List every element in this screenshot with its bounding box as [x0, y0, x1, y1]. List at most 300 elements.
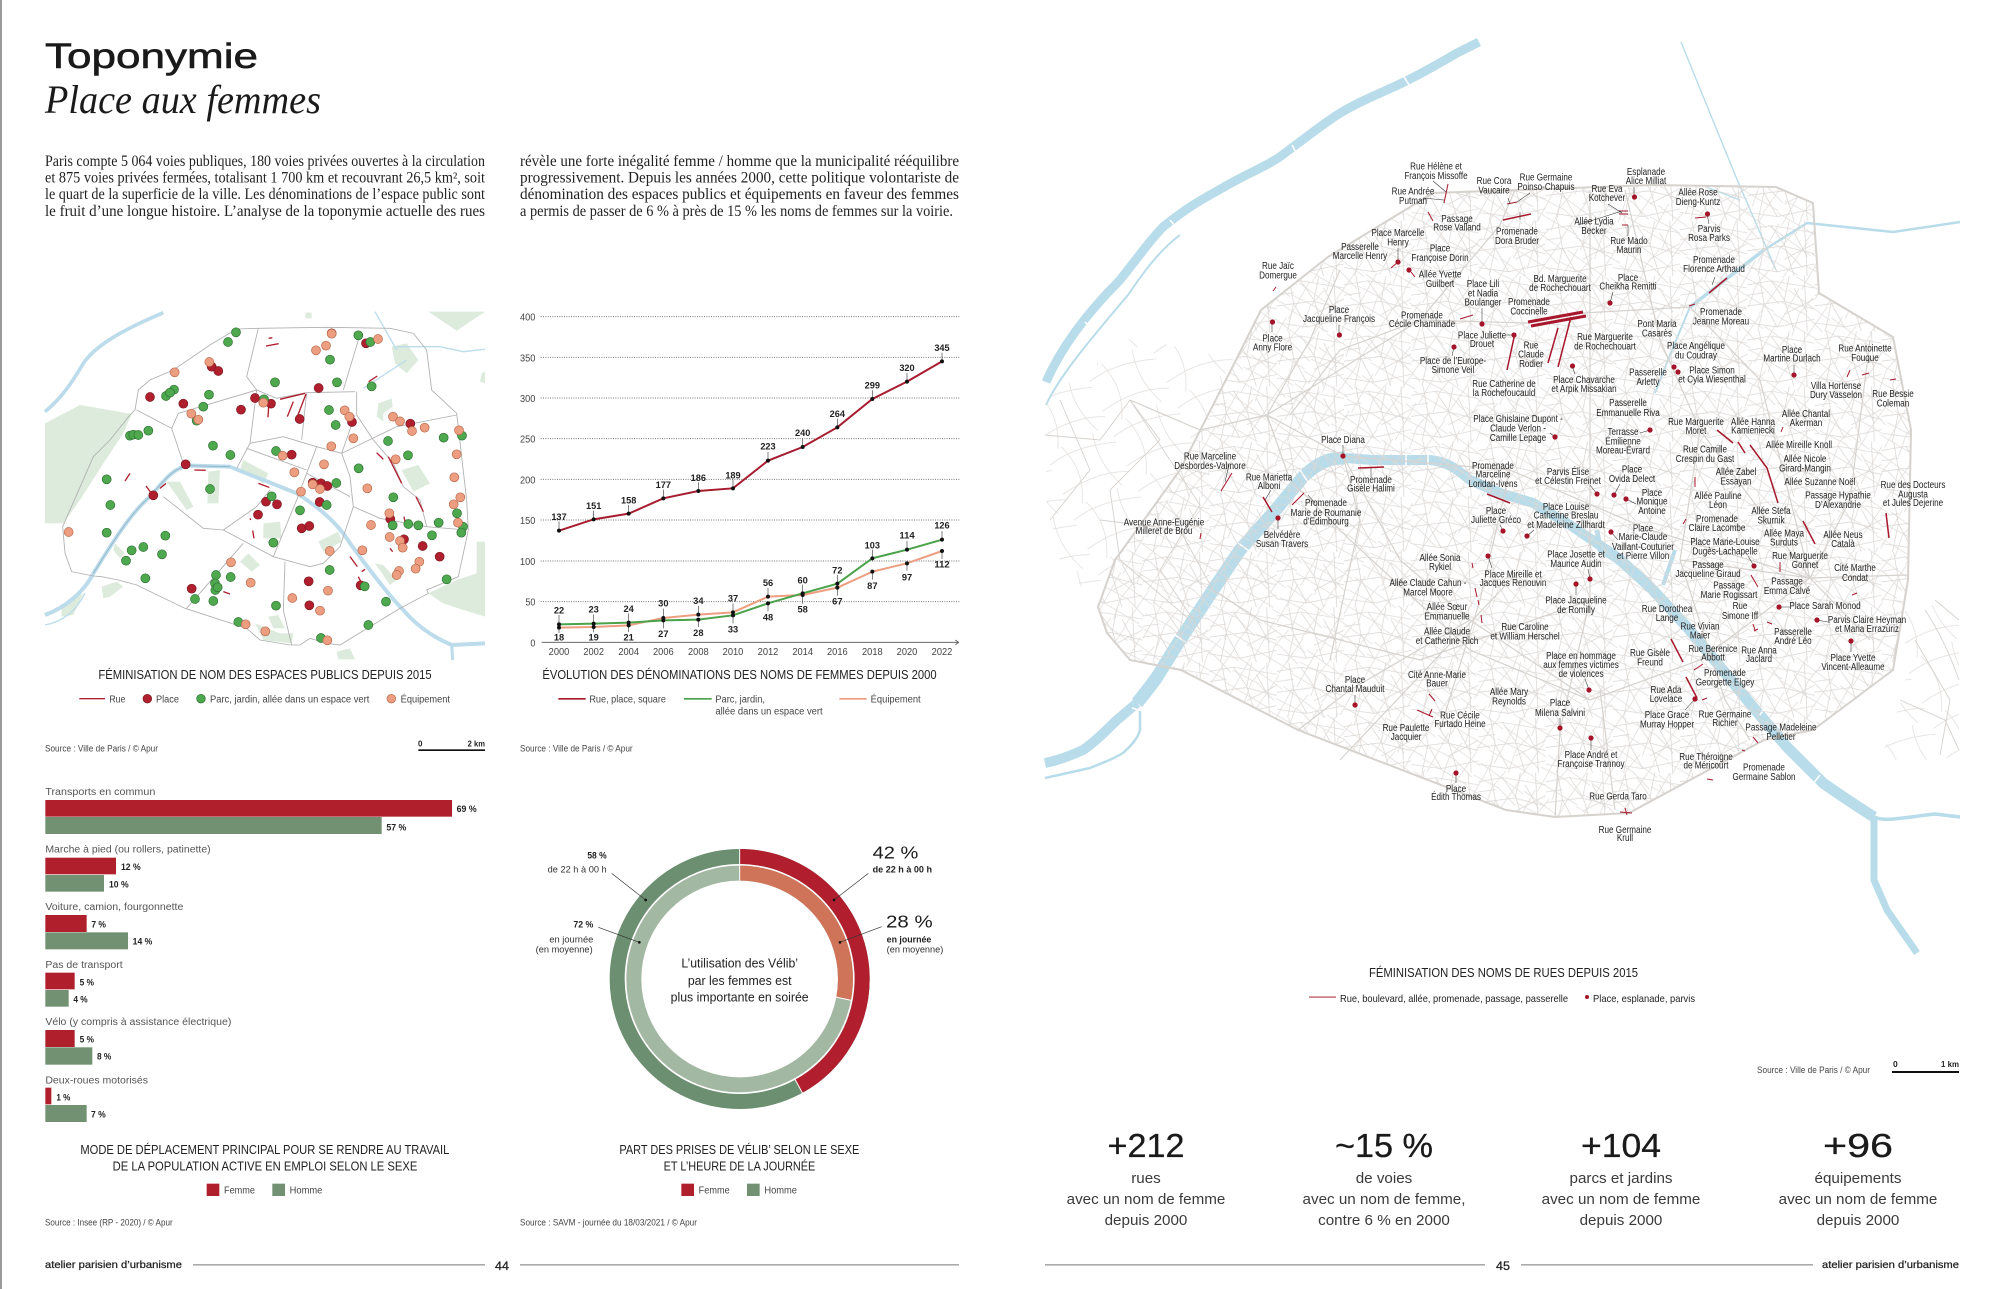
- chart value labels: 223: [760, 442, 776, 452]
- street name labels: Ovida Delect: [1609, 473, 1656, 484]
- street name labels: Jacquier: [1391, 731, 1421, 742]
- street name labels: de Rochechouart: [1529, 282, 1591, 293]
- bar category labels: Marche à pied (ou rollers, patinette): [45, 845, 211, 856]
- street name labels: Essayan: [1720, 476, 1752, 487]
- street name labels: Rose Valland: [1433, 222, 1481, 233]
- street name labels: Promenade: [1305, 497, 1347, 508]
- street name labels: Allée Neus: [1823, 529, 1863, 540]
- chart x axis: 2004: [618, 647, 640, 658]
- street name labels: Abbott: [1701, 652, 1725, 663]
- bar category labels: Voiture, camion, fourgonnette: [45, 902, 184, 913]
- callout 42 percent: 42 %: [873, 842, 918, 862]
- street name labels: Condat: [1842, 572, 1868, 583]
- bar value labels: 14 %: [133, 937, 153, 947]
- series: parks: [559, 540, 942, 624]
- stat: +212 streets: +212: [1108, 1127, 1184, 1164]
- street name labels: Dugès-Lachapelle: [1692, 546, 1758, 557]
- street name labels: Allée Zabel: [1716, 466, 1756, 477]
- street name labels: Allée Sonia: [1420, 552, 1461, 563]
- street name labels: Place Juliette: [1458, 330, 1506, 341]
- street name labels: Kamieniecki: [1731, 425, 1775, 436]
- street name labels: Passerelle: [1774, 626, 1812, 637]
- street name labels: et Arpik Missakian: [1551, 383, 1617, 394]
- street name labels: Rue Vivian: [1680, 621, 1720, 632]
- street name labels: d’Edimbourg: [1303, 516, 1349, 527]
- street name labels: Murray Hopper: [1640, 719, 1694, 730]
- street name labels: Juliette Gréco: [1471, 514, 1521, 525]
- street name labels: Parvis Claire Heyman: [1828, 614, 1906, 625]
- footer right page: 45: [1496, 1259, 1510, 1273]
- map source: Source : Ville de Paris / © Apur: [45, 744, 158, 754]
- stat: +96 equipment: depuis 2000: [1817, 1212, 1899, 1229]
- street name labels: Dieng-Kuntz: [1676, 196, 1721, 207]
- street name labels: Anny Flore: [1253, 342, 1292, 353]
- chart value labels: 103: [865, 541, 880, 551]
- stat: +96 equipment: avec un nom de femme: [1779, 1191, 1937, 1208]
- bar chart legend: Femme: [224, 1185, 255, 1196]
- stat: 15 percent of streets: [1303, 1127, 1465, 1229]
- bar chart legend: [207, 1184, 323, 1196]
- chart x axis: 2006: [653, 647, 674, 658]
- street name labels: Allée Pauline: [1694, 490, 1742, 501]
- bars: homme: [45, 817, 382, 1122]
- street name labels: Rue Ada: [1650, 684, 1682, 695]
- map markers: place: [145, 329, 444, 610]
- bar value labels: 7 %: [91, 1110, 106, 1120]
- street name labels: et Jules Dejerine: [1883, 497, 1943, 508]
- street name labels: de Romilly: [1557, 604, 1595, 615]
- chart x axis: 2002: [583, 647, 604, 658]
- street name labels: Rue Théroigne: [1679, 751, 1733, 762]
- chart x axis: [542, 640, 959, 658]
- bar value labels: 69 %: [457, 804, 477, 814]
- callout 58 percent: de 22 h à 00 h: [548, 865, 607, 875]
- chart x axis: 2016: [827, 647, 848, 658]
- donut legend: Femme: [699, 1185, 730, 1196]
- street name labels: Rue Gerda Taro: [1589, 791, 1647, 802]
- chart x axis: 2018: [862, 647, 883, 658]
- title: Place aux femmes: [44, 77, 321, 122]
- callout 58 percent: [548, 851, 607, 875]
- chart x axis: 2000: [549, 647, 569, 658]
- chart gridlines and y axis: 300: [520, 394, 535, 405]
- street name labels: Antoine: [1638, 505, 1666, 516]
- street name labels: Cité Marthe: [1834, 562, 1876, 573]
- street name labels: Rue Marceline: [1184, 451, 1236, 462]
- street name labels: Rue Antoinette: [1838, 343, 1892, 354]
- river islands and bridges: [1085, 70, 1820, 790]
- donut heading: [619, 1142, 859, 1173]
- street name labels: Gisèle Halimi: [1347, 483, 1395, 494]
- renamed streets: [1200, 184, 1896, 815]
- street name labels: Boulanger: [1465, 297, 1501, 308]
- street name labels: Rue des Docteurs: [1881, 479, 1946, 490]
- panel: map of public spaces feminisation: [45, 312, 485, 754]
- bar category labels: Transports en commun: [45, 787, 155, 798]
- street name labels: Florence Arthaud: [1683, 263, 1745, 274]
- footer right page: atelier parisien d’urbanisme: [1822, 1259, 1959, 1271]
- street name labels: Place: [1618, 272, 1638, 283]
- main map legend: Place, esplanade, parvis: [1593, 993, 1695, 1005]
- street name labels: Rue Andrée: [1392, 186, 1434, 197]
- street name labels: Place Simon: [1689, 365, 1735, 376]
- donut outer ring: [617, 856, 862, 1101]
- text block: introduction left column: le quart de la superficie de la ville. Les dénominations de l’espace public sont: [45, 186, 486, 203]
- stat: +104 parks: parcs et jardins: [1570, 1170, 1673, 1187]
- street name labels: Place: [1329, 304, 1349, 315]
- donut source: Source : SAVM - journée du 18/03/2021 / © Apur: [520, 1218, 697, 1228]
- chart heading: ÉVOLUTION DES DÉNOMINATIONS DES NOMS DE FEMMES DEPUIS 2000: [542, 667, 937, 682]
- street name labels: Place Louise: [1543, 501, 1589, 512]
- chart source: Source : Ville de Paris / © Apur: [520, 744, 633, 754]
- street name labels: Jeanne Moreau: [1693, 316, 1749, 327]
- street name labels: Rue Cora: [1477, 175, 1512, 186]
- main roads and ring road: [1045, 185, 1959, 817]
- street name labels: Rue Bessie: [1872, 388, 1914, 399]
- street name labels: Emmanuelle Riva: [1596, 407, 1660, 418]
- stat: 15 percent of streets: avec un nom de femme,: [1303, 1191, 1465, 1208]
- street name labels: de violences: [1558, 668, 1604, 679]
- street name labels: Édith Thomas: [1431, 791, 1481, 802]
- street name labels: Català: [1831, 538, 1855, 549]
- chart value labels: 264: [830, 409, 846, 419]
- street name labels: Place Jacqueline: [1545, 595, 1607, 606]
- street name labels: Allée Chantal: [1782, 408, 1830, 419]
- street name labels: Promenade: [1700, 306, 1742, 317]
- chart x axis: 2012: [758, 647, 778, 658]
- street name labels: Emma Calvé: [1764, 585, 1810, 596]
- street name labels: Maier: [1690, 630, 1710, 641]
- street name labels: Catherine Breslau: [1534, 510, 1598, 521]
- street name labels: Claire Lacombe: [1689, 522, 1745, 533]
- street name labels: D’Alexandrie: [1815, 499, 1861, 510]
- street name labels: Passage Hypathie: [1805, 490, 1871, 501]
- donut legend: [681, 1184, 797, 1196]
- street name labels: Place: [1262, 333, 1283, 344]
- street name labels: Allée Suzanne Noël: [1784, 476, 1856, 487]
- street name labels: Place Marcelle: [1371, 227, 1425, 238]
- donut centre text: [671, 956, 809, 1004]
- street name labels: Place: [1486, 505, 1506, 516]
- stat: +104 parks: +104: [1581, 1127, 1661, 1164]
- street name labels: Émilienne: [1605, 436, 1641, 447]
- street name labels: Girard-Mangin: [1779, 463, 1831, 474]
- bar chart heading: MODE DE DÉPLACEMENT PRINCIPAL POUR SE RENDRE AU TRAVAIL: [80, 1142, 449, 1157]
- street name labels: Rykiel: [1429, 561, 1451, 572]
- street name labels: Rue: [1733, 600, 1747, 611]
- street name labels: Cécile Chaminade: [1389, 318, 1455, 329]
- street name labels: Simone Veil: [1432, 364, 1474, 375]
- street name labels: Rue Eva: [1591, 183, 1623, 194]
- street name labels: Rosa Parks: [1688, 232, 1730, 243]
- street name labels: Marcelle Henry: [1333, 250, 1388, 261]
- street name labels: Place Lili: [1467, 278, 1499, 289]
- panel: bar chart commuting mode: [45, 787, 477, 1228]
- street name labels: Allée Hanna: [1731, 416, 1776, 427]
- street name labels: Alboni: [1258, 480, 1280, 491]
- stat: +212 streets: rues: [1131, 1170, 1161, 1187]
- street name labels: Belvédère: [1264, 529, 1300, 540]
- street name labels: Rue Germaine: [1599, 824, 1651, 835]
- street name labels: de Méricourt: [1683, 760, 1729, 771]
- chart value labels: 87: [867, 581, 877, 591]
- street name labels: Desbordes-Valmore: [1174, 460, 1246, 471]
- footer left page: [45, 1259, 959, 1273]
- donut legend: Homme: [764, 1185, 797, 1196]
- bar category labels: Deux-roues motorisés: [45, 1075, 148, 1086]
- street name labels: Rue Gisèle: [1630, 647, 1670, 658]
- street name labels: Furtado Heine: [1434, 718, 1486, 729]
- bars: femme: [45, 800, 452, 1104]
- street name labels: Place: [1642, 487, 1662, 498]
- street name labels: Maurin: [1617, 244, 1641, 255]
- chart value labels: 151: [586, 501, 601, 511]
- chart value labels: 23: [588, 604, 599, 614]
- chart value labels: 22: [554, 606, 564, 616]
- street name labels: Avenue Anne-Eugénie: [1124, 517, 1204, 528]
- panel: donut chart Velib: [520, 842, 943, 1228]
- street name labels: Becker: [1581, 225, 1607, 236]
- street network texture: [1046, 185, 1959, 817]
- callout 72 percent: en journée: [549, 934, 593, 944]
- map parks: [45, 312, 485, 659]
- chart value labels: 18: [554, 633, 564, 643]
- donut heading: ET L’HEURE DE LA JOURNÉE: [664, 1158, 815, 1173]
- street name labels: Place Mireille et: [1484, 569, 1542, 580]
- street name labels: Henry: [1387, 237, 1409, 248]
- bar value labels: 4 %: [73, 995, 88, 1005]
- series: equipment: [559, 551, 942, 628]
- bar value labels: 5 %: [80, 977, 95, 987]
- street name labels: Rue Marguerite: [1772, 550, 1828, 561]
- street name labels: Passage: [1771, 576, 1803, 587]
- street name labels: Promenade: [1704, 667, 1746, 678]
- street name labels: Claude: [1518, 349, 1544, 360]
- street name labels: Place André et: [1565, 749, 1618, 760]
- footer left page: 44: [495, 1259, 509, 1273]
- street name labels: Jacqueline François: [1303, 313, 1375, 324]
- chart x axis: 2014: [792, 647, 814, 658]
- street name labels: Loridan-Ivens: [1468, 478, 1518, 489]
- street name labels: Reynolds: [1492, 696, 1526, 707]
- chart value labels: 30: [658, 599, 668, 609]
- chart value labels: 60: [797, 575, 808, 585]
- street name labels: Augusta: [1898, 489, 1929, 500]
- chart x axis: 2022: [932, 647, 952, 658]
- street name labels: Allée Claude: [1424, 626, 1470, 637]
- street name labels: Place Josette et: [1547, 549, 1605, 560]
- stat: +104 parks: avec un nom de femme: [1542, 1191, 1700, 1208]
- street name labels: Place: [1446, 783, 1466, 794]
- title: Toponymie: [45, 37, 258, 76]
- street name labels: Chantal Mauduit: [1326, 683, 1385, 694]
- chart value labels: 21: [623, 633, 634, 643]
- street name labels: Rue Camille: [1683, 444, 1727, 455]
- street name labels: de Rochechouart: [1574, 341, 1636, 352]
- street name labels: Allée Maya: [1764, 528, 1805, 539]
- chart value labels: 24: [623, 604, 635, 614]
- panel: line chart evolution of names: [520, 313, 960, 754]
- text block: introduction left column: Paris compte 5 064 voies publiques, 180 voies privées ouvertes à la circulation: [45, 153, 485, 170]
- street name labels: Allée Yvette: [1419, 269, 1461, 280]
- street name labels: Lange: [1656, 612, 1678, 623]
- street name labels: Parvis: [1698, 223, 1721, 234]
- street name labels: Drouet: [1470, 338, 1495, 349]
- chart gridlines and y axis: [520, 313, 960, 649]
- street name labels: Germaine Sablon: [1732, 771, 1796, 782]
- street name labels: Rue Marguerite: [1668, 416, 1724, 427]
- bar value labels: [56, 804, 477, 1120]
- street name labels: Allée Lydia: [1574, 216, 1614, 227]
- bar category labels: Vélo (y compris à assistance électrique): [45, 1017, 231, 1028]
- street name labels: Camille Lepage: [1490, 432, 1546, 443]
- street name labels: Jacques Renouvin: [1480, 577, 1546, 588]
- main map legend: Rue, boulevard, allée, promenade, passage, passerelle: [1340, 993, 1568, 1005]
- street name labels: Passerelle: [1341, 241, 1379, 252]
- street name labels: Allée Stefa: [1751, 505, 1791, 516]
- map legend: [79, 692, 450, 705]
- stat: 15 percent of streets: ~15 %: [1335, 1127, 1433, 1164]
- street name labels: Rue Paulette: [1383, 722, 1429, 733]
- bar value labels: 8 %: [97, 1052, 112, 1062]
- main map scale bar: 1 km: [1941, 1059, 1959, 1069]
- street name labels: Allée Claude Cahun -: [1389, 577, 1467, 588]
- map scale bar: 0: [418, 740, 423, 749]
- stat: +96 equipment: [1779, 1127, 1937, 1229]
- street name labels: Claude Verlon -: [1490, 423, 1546, 434]
- callout 28 percent: en journée: [887, 934, 931, 944]
- stat: +104 parks: [1542, 1127, 1700, 1229]
- street name labels: Rue Marietta: [1246, 472, 1293, 483]
- chart value labels: 56: [763, 578, 773, 588]
- street name labels: Léon: [1709, 499, 1727, 510]
- street name labels: Rue Dorothea: [1642, 603, 1693, 614]
- bar category labels: Pas de transport: [45, 960, 123, 971]
- street name labels: Rue Hélène et: [1410, 161, 1462, 172]
- text block: introduction right column: dénomination des espaces publics et équipements en faveur des femmes: [520, 186, 959, 203]
- callout 28 percent: 28 %: [886, 911, 933, 931]
- street name labels: Jacqueline Giraud: [1675, 568, 1741, 579]
- street name labels: Place: [1622, 464, 1642, 475]
- text block: introduction right column: a permis de passer de 6 % à près de 15 % les noms de femmes sur la voirie.: [520, 203, 953, 220]
- street name labels: Promenade: [1472, 460, 1514, 471]
- street name labels: Passage: [1441, 213, 1473, 224]
- street name labels: Freund: [1637, 657, 1663, 668]
- main map source: Source : Ville de Paris / © Apur: [1757, 1065, 1870, 1075]
- street name labels: Marcel Moore: [1403, 587, 1453, 598]
- street name labels: Place Marie-Louise: [1690, 536, 1760, 547]
- street name labels: Richier: [1712, 717, 1738, 728]
- street name labels: Krull: [1617, 832, 1633, 843]
- map markers: equipment: [64, 329, 465, 645]
- footer right page: [1045, 1259, 1959, 1273]
- street name labels: Place Chavarche: [1553, 374, 1615, 385]
- street name labels: Passage: [1713, 580, 1745, 591]
- stat: +212 streets: avec un nom de femme: [1067, 1191, 1225, 1208]
- main map scale bar: 0: [1893, 1059, 1898, 1069]
- chart legend: Rue, place, square: [589, 694, 666, 705]
- callout 42 percent: [873, 842, 932, 875]
- callout 72 percent: (en moyenne): [536, 945, 593, 955]
- street name labels: Parvis Élise: [1547, 466, 1589, 477]
- street name labels: Allée Sœur: [1427, 601, 1467, 612]
- street name labels: Rue Caroline: [1501, 621, 1549, 632]
- chart gridlines and y axis: 50: [525, 598, 535, 609]
- street name labels: Passage: [1692, 559, 1724, 570]
- callout 42 percent: de 22 h à 00 h: [873, 865, 932, 875]
- street name labels: Moreau-Évrard: [1596, 445, 1650, 456]
- chart value labels: 299: [865, 380, 880, 390]
- map markers: parks: [102, 328, 467, 642]
- street name labels: Esplanade: [1627, 166, 1665, 177]
- map scale bar: 2 km: [468, 740, 485, 749]
- callout 72 percent: [536, 919, 594, 955]
- chart legend: [558, 692, 921, 717]
- bar value labels: 10 %: [109, 879, 129, 889]
- street name labels: Marie de Roumanie: [1291, 507, 1361, 518]
- chart value labels: 72: [832, 565, 842, 575]
- street name labels: Rue Germaine: [1520, 172, 1572, 183]
- bar value labels: 7 %: [91, 919, 107, 929]
- chart legend: Parc, jardin,: [715, 694, 765, 705]
- street name labels: Place: [1633, 523, 1653, 534]
- street name labels: Promenade: [1496, 226, 1538, 237]
- street name labels: Dury Vasselon: [1810, 389, 1862, 400]
- street name labels: Marie Rogissart: [1701, 589, 1758, 600]
- street name labels: et Nadia: [1468, 288, 1499, 299]
- street name labels: Akerman: [1790, 417, 1822, 428]
- street name labels: Place de l’Europe-: [1420, 355, 1486, 366]
- street name labels: Marie-Claude: [1619, 531, 1667, 542]
- street name labels: Emmanuelle: [1424, 611, 1470, 622]
- callout 28 percent: (en moyenne): [887, 945, 943, 955]
- chart value labels: 28: [693, 628, 703, 638]
- street name labels: Milleret de Brou: [1136, 525, 1192, 536]
- street name labels: Moret: [1686, 425, 1707, 436]
- street name labels: et Madeleine Zillhardt: [1527, 519, 1605, 530]
- street name labels: Kotchever: [1589, 192, 1625, 203]
- map legend: Rue: [109, 694, 126, 705]
- text block: introduction right column: révèle une forte inégalité femme / homme que la municipalité rééquilibre: [520, 153, 959, 170]
- street name labels: Françoise Trannoy: [1557, 758, 1625, 769]
- street name labels: Place: [1550, 697, 1570, 708]
- street name labels: Allée Rose: [1678, 187, 1718, 198]
- street name labels: Rue: [1524, 340, 1538, 351]
- map legend: Équipement: [401, 692, 450, 705]
- chart gridlines and y axis: 350: [520, 353, 535, 364]
- bar value labels: 5 %: [80, 1034, 95, 1044]
- chart x axis: 2020: [897, 647, 917, 658]
- map legend: Place: [156, 694, 179, 705]
- street name labels: Villa Hortense: [1811, 380, 1861, 391]
- chart value labels: 33: [728, 625, 738, 635]
- chart value labels: 320: [899, 363, 915, 373]
- street name labels: Bd. Marguerite: [1533, 273, 1587, 284]
- chart data points: [557, 359, 944, 630]
- street name labels: Place: [1782, 344, 1802, 355]
- donut heading: PART DES PRISES DE VÉLIB’ SELON LE SEXE: [619, 1142, 859, 1157]
- street name labels: Rue Berenice: [1688, 643, 1738, 654]
- main map legend: [1309, 993, 1695, 1005]
- street name labels: Vaillant-Couturier: [1612, 541, 1674, 552]
- chart legend: allée dans un espace vert: [715, 706, 823, 717]
- street name labels: Putman: [1399, 195, 1427, 206]
- street name labels: Rue Anna: [1741, 645, 1778, 656]
- main map scale bar: [1892, 1059, 1959, 1073]
- callout 58 percent: 58 %: [587, 851, 607, 861]
- chart gridlines and y axis: 200: [520, 475, 535, 486]
- bar chart heading: DE LA POPULATION ACTIVE EN EMPLOI SELON LE SEXE: [113, 1159, 417, 1174]
